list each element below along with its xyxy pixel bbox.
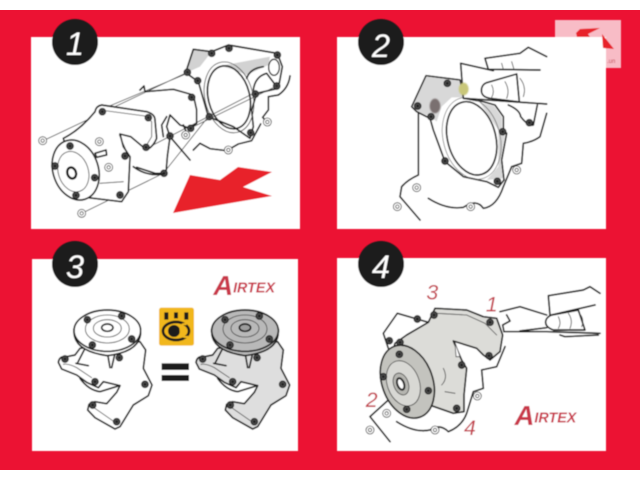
tightening order numbers (365, 281, 498, 440)
Airtex logo: A (514, 400, 534, 431)
Airtex logo: IRTEX (233, 280, 276, 296)
watermark: .un (607, 59, 615, 65)
red arrow (173, 167, 272, 213)
painted pump grey (196, 310, 290, 429)
panel 2 background (337, 37, 606, 229)
panel 3 background (32, 259, 298, 451)
step 4 badge (358, 241, 404, 287)
panel 1: remove old pump (31, 19, 300, 229)
Airtex logo: A (212, 270, 233, 301)
equals sign (162, 363, 189, 381)
new pump unpainted (58, 310, 152, 429)
tightening order numbers: 4 (464, 416, 476, 440)
exploded pump diagram (39, 45, 290, 217)
wrench and hand (500, 287, 600, 337)
panel 2: clean mating surface (337, 19, 606, 229)
tightening order numbers: 2 (365, 388, 378, 412)
step 1 badge: 1 (66, 25, 84, 62)
hand (461, 47, 547, 104)
step 3 badge: 3 (66, 248, 84, 285)
step 4 badge: 4 (372, 248, 390, 285)
step 2 badge (358, 19, 404, 65)
panel 4 background (337, 258, 606, 451)
tightening order numbers: 1 (486, 293, 498, 317)
panel 3: pump comparison (32, 241, 298, 451)
watermark (555, 20, 621, 68)
Airtex logo: IRTEX (534, 410, 578, 426)
step 3 badge (52, 241, 98, 287)
gasket surface and hand diagram (393, 47, 547, 220)
installed pump (371, 308, 503, 426)
icon: yellow inspection symbol (159, 308, 194, 346)
engine outline (370, 313, 505, 442)
panel 1 background (31, 37, 300, 229)
step 2 badge: 2 (371, 27, 390, 64)
panel 4: tighten bolts (337, 241, 606, 451)
step 1 badge (52, 19, 98, 65)
tightening order numbers: 3 (426, 281, 438, 305)
